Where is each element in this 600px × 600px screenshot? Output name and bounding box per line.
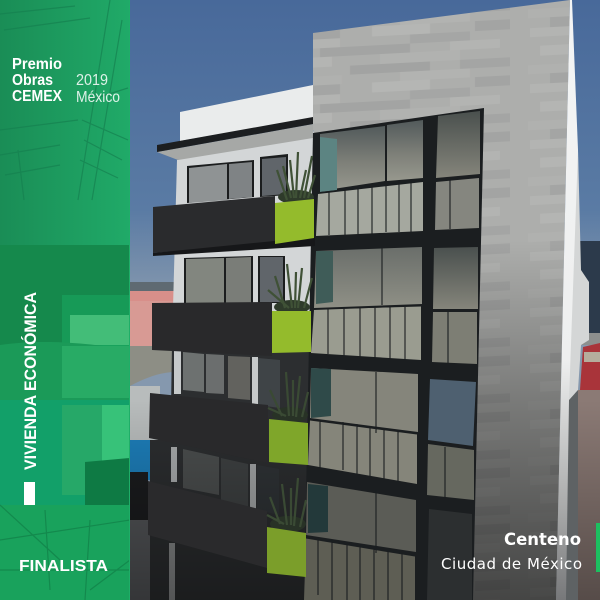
planter 1	[275, 152, 315, 244]
project caption: Ciudad de México	[441, 555, 582, 573]
title block: Premio Obras CEMEX: Premio	[12, 56, 62, 73]
left green panel	[0, 0, 130, 600]
planter 3	[268, 372, 308, 465]
floor 1 windows	[316, 111, 480, 236]
status: Finalista: FINALISTA	[19, 558, 108, 575]
panel divider	[129, 0, 130, 600]
project caption	[441, 530, 582, 573]
panel photo section	[0, 245, 130, 600]
building white wall	[157, 85, 320, 600]
title block: Premio Obras CEMEX: Obras	[12, 72, 53, 89]
planter 4	[267, 478, 306, 577]
year and country: México	[76, 89, 120, 106]
project caption: Centeno	[504, 530, 581, 550]
category marker	[24, 482, 35, 505]
panel upper section	[0, 0, 130, 300]
lower image shade	[130, 400, 600, 600]
white pillars	[169, 351, 258, 600]
title block: Premio Obras CEMEX: CEMEX	[12, 88, 63, 105]
stone tower	[313, 0, 570, 600]
floor 2 windows	[311, 247, 478, 364]
year and country	[76, 72, 120, 106]
sketch lines	[0, 0, 128, 200]
category label: Vivienda Económica: VIVIENDA ECONÓMICA	[21, 292, 40, 470]
floor 3 windows	[308, 368, 476, 500]
title block: Premio Obras CEMEX	[12, 56, 63, 105]
balconies	[148, 196, 315, 568]
year and country: 2019	[76, 72, 108, 89]
white side face of tower	[556, 0, 589, 600]
floor 4 windows	[304, 482, 472, 600]
side windows on the left of the facade	[169, 154, 288, 600]
accent bar	[596, 523, 600, 572]
window block frame	[304, 108, 484, 600]
planter 2	[268, 264, 312, 353]
planters with plants	[267, 152, 315, 577]
